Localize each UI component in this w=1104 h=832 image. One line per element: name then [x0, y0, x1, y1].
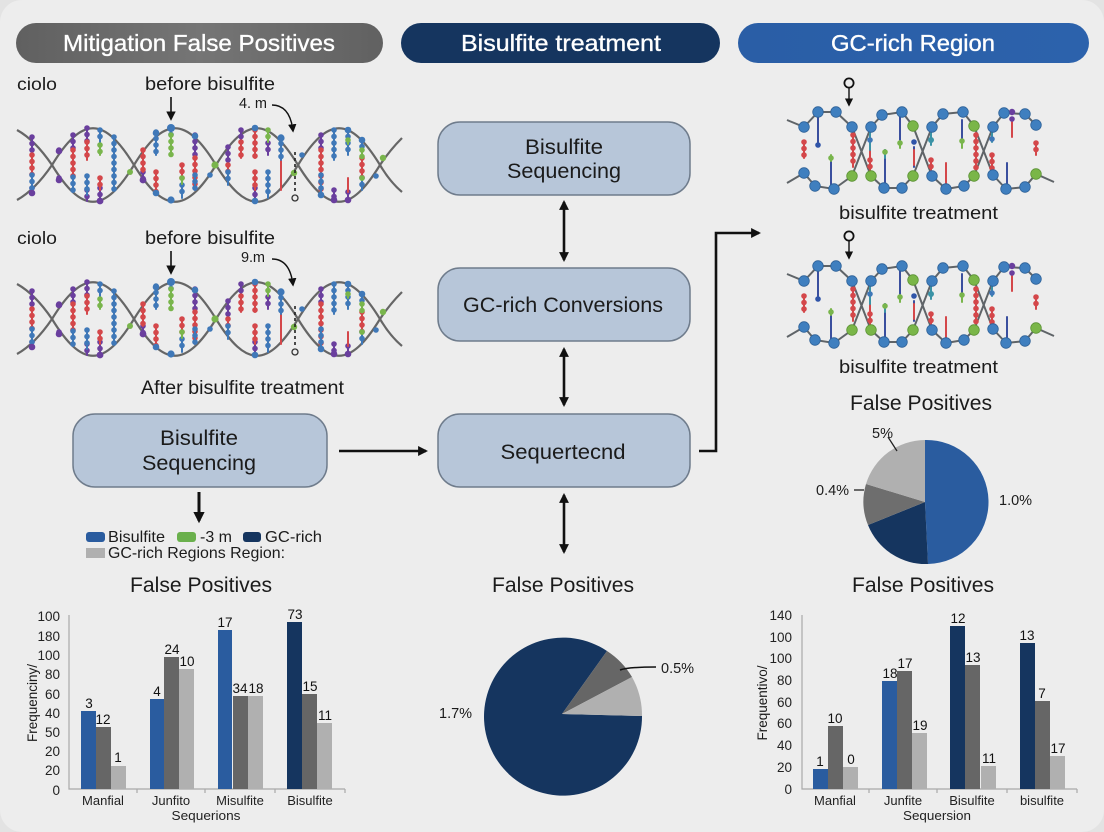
category labels: Misulfite — [216, 793, 264, 808]
caption: after bisulfite treatment: After bisulfite treatment — [141, 378, 345, 399]
y ticks: 100 — [769, 651, 792, 666]
header: bisulfite treatment — [401, 23, 720, 63]
bars — [81, 622, 332, 789]
category labels: Sequerions — [172, 808, 241, 823]
panel: upper DNA helix with labels: ciolo — [17, 74, 57, 94]
panel: lower DNA helix with labels: ciolo — [17, 228, 57, 248]
y ticks: 140 — [769, 608, 792, 623]
box: GC-rich conversions — [438, 268, 690, 341]
center pie chart — [439, 574, 694, 796]
header: mitigation false positives — [16, 23, 383, 63]
box: bisulfite sequencing left: Bisulfite — [160, 427, 238, 450]
arrow: left box to sequencing box — [339, 450, 426, 452]
category labels — [82, 793, 333, 823]
right bar chart: False Positives — [852, 574, 994, 597]
bars — [813, 626, 1065, 789]
category labels: Sequersion — [903, 808, 971, 823]
y ticks: 50 — [45, 725, 60, 740]
legend: GC-rich — [265, 529, 322, 546]
y ticks: 100 — [37, 609, 60, 624]
value labels — [816, 611, 1066, 769]
category labels — [814, 793, 1064, 823]
category labels: Manfial — [82, 793, 124, 808]
right pie chart — [816, 392, 1032, 564]
value labels: 73 — [287, 607, 303, 622]
category labels: bisulfite — [1020, 793, 1064, 808]
value labels: 10 — [827, 711, 843, 726]
y ticks: 20 — [45, 744, 60, 759]
category labels: Manfial — [814, 793, 856, 808]
panel: upper DNA helix with labels: before bisulfite — [145, 74, 275, 94]
value labels: 11 — [318, 708, 332, 723]
double arrow 3 — [563, 495, 565, 552]
category labels: Bisulfite — [287, 793, 333, 808]
header: bisulfite treatment: Bisulfite treatment — [461, 30, 662, 56]
legend: -3 m — [200, 529, 232, 546]
value labels: 3 — [85, 696, 93, 711]
box: sequertecnd: Sequertecnd — [500, 441, 626, 464]
right pie chart: 1.0% — [999, 493, 1032, 509]
panel: right lower DNA: bisulfite treatment — [839, 357, 998, 377]
value labels: 10 — [179, 654, 195, 669]
value labels: 12 — [950, 611, 966, 626]
panel: right upper DNA: bisulfite treatment — [839, 203, 998, 223]
value labels: 4 — [153, 684, 161, 699]
y ticks: 0 — [784, 782, 792, 797]
box: bisulfite sequencing left — [73, 414, 327, 487]
y ticks: 0 — [52, 783, 60, 798]
y ticks: 100 — [37, 648, 60, 663]
y axis label: Frequentivo/ — [755, 665, 770, 741]
value labels: 13 — [965, 650, 981, 665]
value labels — [85, 607, 332, 765]
y ticks: 60 — [777, 716, 792, 731]
header: mitigation false positives: Mitigation False Positives — [63, 30, 335, 56]
y ticks — [37, 609, 60, 798]
value labels: 13 — [1019, 628, 1035, 643]
y ticks: 60 — [777, 695, 792, 710]
right bar chart — [755, 574, 1077, 823]
value labels: 15 — [302, 679, 318, 694]
center pie chart: False Positives — [492, 574, 634, 597]
panel: upper DNA helix with labels — [17, 74, 402, 204]
center pie chart: 0.5% — [661, 661, 694, 677]
value labels: 18 — [248, 681, 264, 696]
box: sequertecnd — [438, 414, 690, 487]
arrow: left box down to legend — [198, 492, 200, 521]
panel: lower DNA helix with labels: before bisulfite — [145, 228, 275, 248]
legend: GC-rich Regions Region: — [108, 545, 285, 562]
y ticks: 40 — [45, 706, 60, 721]
y ticks: 40 — [777, 738, 792, 753]
value labels: 24 — [164, 642, 180, 657]
value labels: 11 — [982, 751, 996, 766]
value labels: 12 — [95, 712, 111, 727]
y ticks: 80 — [45, 667, 60, 682]
box: bisulfite sequencing left: Sequencing — [142, 452, 256, 475]
y ticks: 20 — [777, 760, 792, 775]
y ticks: 60 — [45, 687, 60, 702]
y ticks — [769, 608, 792, 797]
box: GC-rich conversions: GC-rich Conversions — [463, 294, 663, 317]
value labels: 7 — [1038, 686, 1046, 701]
value labels: 19 — [912, 718, 928, 733]
y ticks: 80 — [777, 673, 792, 688]
category labels: Junfito — [152, 793, 190, 808]
category labels: Bisulfite — [949, 793, 995, 808]
value labels: 0 — [847, 752, 855, 767]
box: bisulfite sequencing center: Bisulfite — [525, 136, 603, 159]
y ticks: 180 — [37, 629, 60, 644]
double arrow 1 — [563, 202, 565, 260]
header: GC-rich region — [738, 23, 1089, 63]
value labels: 1 — [114, 750, 122, 765]
value labels: 18 — [882, 666, 898, 681]
category labels: Junfite — [884, 793, 922, 808]
value labels: 17 — [897, 656, 913, 671]
panel: right upper DNA — [787, 78, 1054, 223]
legend: Bisulfite — [108, 529, 165, 546]
left bar chart: False Positives — [130, 574, 272, 597]
right pie chart: 5% — [872, 426, 893, 442]
y ticks: 100 — [769, 630, 792, 645]
value labels: 1 — [816, 754, 824, 769]
right pie chart: 0.4% — [816, 483, 849, 499]
double arrow 2 — [563, 349, 565, 405]
y axis label: Frequenciny/ — [25, 664, 40, 742]
left bar chart — [25, 574, 345, 823]
right pie chart: False Positives — [850, 392, 992, 415]
panel: right lower DNA — [787, 231, 1054, 377]
value labels: 17 — [1050, 741, 1066, 756]
panel: lower DNA helix with labels — [17, 228, 402, 358]
panel: lower DNA helix with labels: 9.m — [241, 250, 265, 266]
arrow: elbow to right DNA — [699, 233, 759, 451]
panel: upper DNA helix with labels: 4. m — [239, 96, 267, 112]
value labels: 17 — [217, 615, 233, 630]
legend — [86, 529, 322, 562]
y ticks: 20 — [45, 763, 60, 778]
box: bisulfite sequencing center: Sequencing — [507, 160, 621, 183]
value labels: 34 — [232, 681, 248, 696]
center pie chart: 1.7% — [439, 706, 472, 722]
box: bisulfite sequencing center — [438, 122, 690, 195]
header: GC-rich region: GC-rich Region — [831, 30, 995, 56]
